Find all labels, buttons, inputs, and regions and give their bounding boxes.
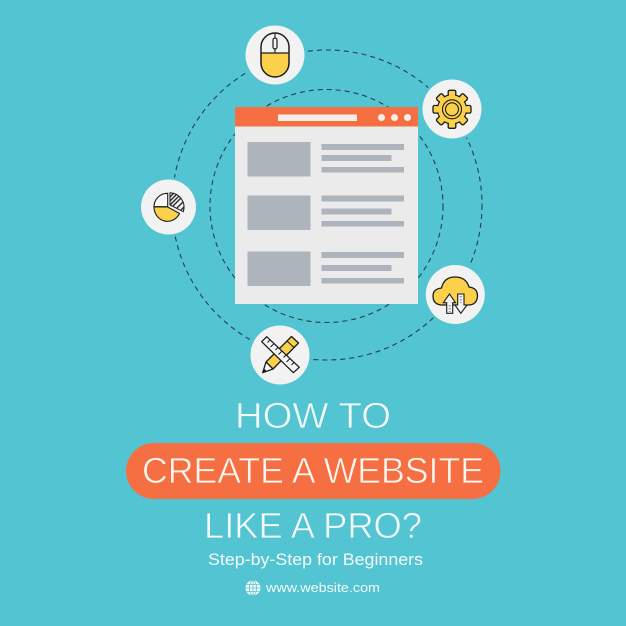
panel: browser window [235,107,418,304]
website line [246,580,380,596]
heading: how to: HOW TO [235,395,391,436]
infographic canvas [126,26,500,596]
icon: cloud transfer [426,265,485,324]
icon: globe [246,580,260,596]
icon: gear [422,80,482,138]
subtitle: Step-by-Step for Beginners [208,550,423,569]
website url: www.website.com [265,580,380,595]
content row 2 [248,196,404,230]
content row 3 [248,252,404,286]
content row 1 [248,142,404,176]
icon: pie chart [141,180,196,234]
heading: like a pro: LIKE A PRO? [204,505,422,546]
icon: computer mouse [246,26,304,84]
heading pill: CREATE A WEBSITE [142,450,484,491]
heading pill [126,443,500,499]
icon: pencil and ruler [250,326,310,384]
browser title bar [235,107,418,126]
